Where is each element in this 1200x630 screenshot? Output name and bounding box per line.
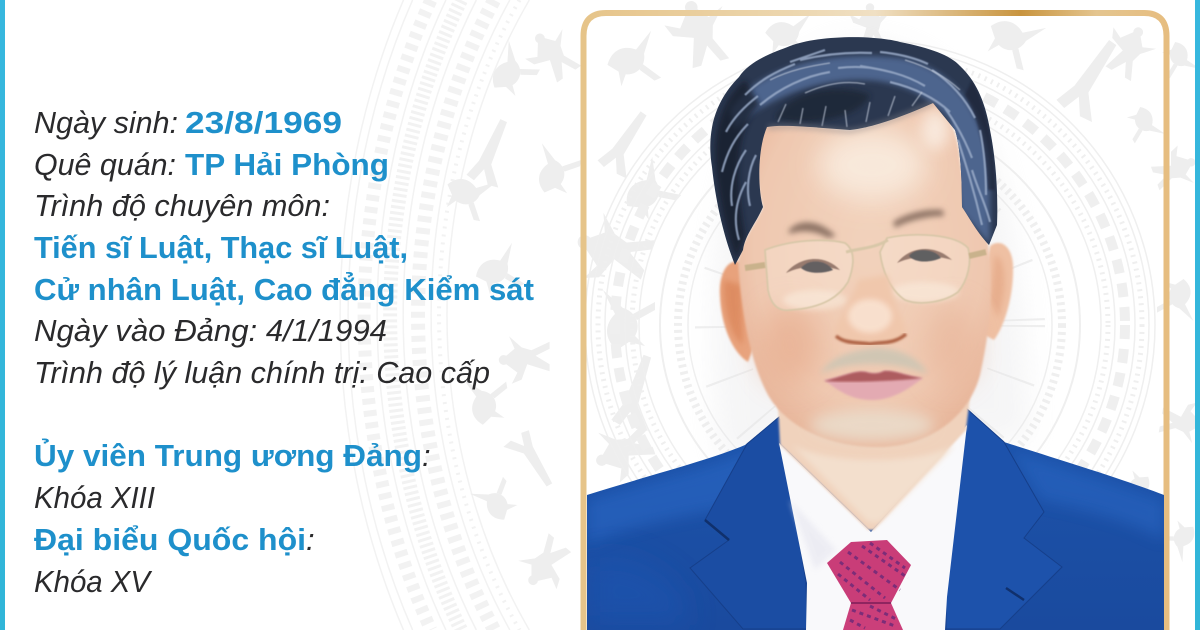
birth date: 23/8/1969: [185, 105, 342, 140]
party admission date: Ngày vào Đảng: 4/1/1994: [34, 313, 387, 348]
nose: [834, 275, 907, 346]
left accent bar: [0, 0, 5, 630]
central committee: Ủy viên Trung ương Đảng: [34, 437, 422, 473]
left lapel: [690, 417, 807, 629]
moustache shadow: [820, 348, 928, 374]
lapel notches: [705, 520, 1024, 600]
biography text: personal details: [34, 105, 534, 390]
political theory level: Trình độ lý luận chính trị: Cao cấp: [34, 355, 490, 390]
background: drum motif ring: [442, 0, 1200, 599]
portrait glow: [728, 228, 1014, 442]
chin shading: [810, 409, 934, 441]
hair strands: [722, 50, 990, 240]
mouth: [824, 371, 923, 400]
central committee: [34, 437, 431, 515]
shirt shadow: [790, 500, 836, 570]
right accent bar: [1195, 0, 1200, 630]
qualifications: Tiến sĩ Luật, Thạc sĩ Luật,: [34, 230, 408, 265]
national assembly: Đại biểu Quốc hội: [34, 522, 306, 557]
shirt collar: [779, 425, 967, 630]
birth date: [34, 105, 342, 140]
home town: Quê quán:: [34, 147, 176, 182]
portrait: [587, 30, 1164, 630]
central committee: :: [422, 438, 431, 473]
hair: [710, 37, 998, 265]
national assembly: :: [306, 522, 315, 557]
central committee: Khóa XIII: [34, 480, 155, 515]
qualifications: Cử nhân Luật, Cao đẳng Kiểm sát: [34, 271, 534, 307]
forehead highlight: [817, 129, 927, 201]
hairline softening: [768, 103, 933, 131]
national assembly: Khóa XV: [34, 564, 153, 599]
national assembly: [34, 522, 315, 599]
right lapel: [946, 408, 1062, 629]
glasses: [745, 235, 986, 310]
tie: [827, 540, 911, 630]
left ear: [718, 260, 752, 363]
face: [738, 100, 991, 447]
right ear: [986, 242, 1014, 341]
qualifications: [34, 188, 534, 307]
biography text: offices held: [34, 437, 431, 599]
background: bronze drum outer rings: [340, 0, 529, 630]
photo frame: [584, 13, 1166, 630]
eyes: [786, 249, 952, 273]
background: drum inner rings: [585, 40, 1155, 610]
qualifications: Trình độ chuyên môn:: [34, 188, 330, 223]
home town: [34, 147, 389, 182]
birth date: Ngày sinh:: [34, 105, 178, 140]
home town: TP Hải Phòng: [185, 147, 389, 182]
eyebrows: [789, 210, 944, 238]
suit jacket: [587, 405, 1164, 630]
neck: [777, 398, 970, 532]
